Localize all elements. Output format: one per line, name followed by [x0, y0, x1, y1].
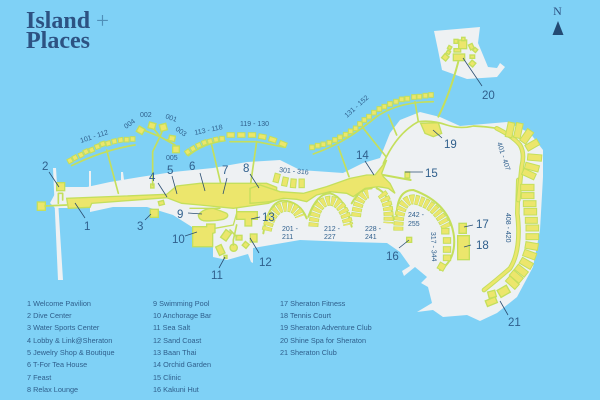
location numbers: 12 [259, 257, 272, 269]
room range labels: 005 [166, 155, 178, 162]
water sports center [150, 209, 158, 217]
legend column 2: 16 Kakuni Hut [153, 385, 199, 394]
room range labels: 119 - 130 [240, 121, 269, 128]
legend column 3: 19 Sheraton Adventure Club [280, 323, 372, 332]
legend column 1: 6 T-For Tea House [27, 360, 87, 369]
villas 228-241 right fill row [382, 193, 389, 223]
east road inner [484, 180, 519, 290]
villas 131-152 [313, 102, 433, 154]
location numbers: 14 [356, 150, 369, 162]
baan thai [237, 212, 257, 226]
villas 212-227 outline row [313, 201, 348, 227]
leader lines [49, 58, 508, 315]
clinic [383, 172, 411, 180]
room range labels: 131 - 152 [344, 94, 370, 119]
location numbers: 18 [476, 240, 489, 252]
location numbers: 11 [211, 270, 223, 282]
room range labels: 101 - 112 [79, 129, 109, 145]
legend column 2: 14 Orchid Garden [153, 360, 211, 369]
room range labels: 201 - [282, 226, 299, 233]
legend column 2: 15 Clinic [153, 373, 181, 382]
legend column 1: 4 Lobby & Link@Sheraton [27, 336, 112, 345]
pier and jetties [53, 168, 124, 280]
title: Island [26, 8, 91, 34]
legend column 2: 12 Sand Coast [153, 336, 201, 345]
room range labels: 228 - [365, 226, 382, 233]
villas 001-005 [136, 122, 179, 153]
legend column 2: 9 Swimming Pool [153, 299, 210, 308]
location numbers: 13 [262, 212, 275, 224]
legend column 1: 2 Dive Center [27, 311, 72, 320]
villas 201-211 fill row [267, 207, 300, 231]
villas 113-118 [188, 141, 225, 156]
villas 401-407 [505, 122, 542, 199]
room range labels: 242 - [408, 212, 425, 219]
location numbers: 1 [84, 221, 90, 233]
room range labels: 255 [408, 221, 420, 228]
room range labels: 408 - 420 [504, 213, 511, 243]
villas 317-344 and 301-316 [273, 173, 451, 271]
south east buildings and road [407, 180, 539, 306]
swimming pool [198, 208, 228, 221]
location numbers: 19 [444, 139, 457, 151]
legend column 1 [27, 299, 115, 394]
spa islet [434, 27, 505, 79]
location numbers: 9 [177, 209, 183, 221]
villas 228-241 left outline row [356, 193, 368, 217]
room range labels: 004 [123, 118, 137, 131]
central yellow band [250, 160, 395, 203]
location numbers: 21 [508, 317, 521, 329]
villas 242-255 fill row [398, 199, 447, 231]
tennis court [458, 236, 469, 260]
villas 408-420 [505, 185, 539, 289]
east road north inner [497, 128, 523, 200]
east road outer [484, 180, 519, 290]
legend column 1: 5 Jewelry Shop & Boutique [27, 348, 115, 357]
north-east roads and villas [310, 37, 542, 200]
legend column 1: 7 Feast [27, 373, 51, 382]
location numbers: 17 [476, 219, 489, 231]
location numbers: 16 [386, 251, 399, 263]
legend column 2: 11 Sea Salt [153, 323, 190, 332]
villas 228-241 left fill row [356, 193, 368, 217]
title [26, 8, 109, 54]
villas 242-255 outline row [398, 199, 447, 231]
room range labels: 401 - 407 [495, 141, 511, 172]
legend column 2 [153, 299, 212, 394]
stems [107, 126, 257, 193]
room range labels: 003 [174, 126, 188, 138]
legend column 3: 18 Tennis Court [280, 311, 331, 320]
east road north outer [497, 128, 523, 200]
location numbers: 7 [222, 165, 228, 177]
room range labels: 317 - 344 [429, 232, 437, 262]
dive center [57, 183, 65, 191]
sheraton fitness [459, 223, 466, 233]
room range labels: 212 - [324, 226, 341, 233]
sheraton adventure club [421, 123, 442, 137]
legend column 1: 3 Water Sports Center [27, 323, 100, 332]
legend column 3: 21 Sheraton Club [280, 348, 337, 357]
room range labels: 001 [164, 113, 178, 124]
room range labels: 241 [365, 234, 377, 241]
location numbers: 8 [243, 163, 249, 175]
room range labels: 113 - 118 [194, 124, 223, 137]
villas 101-112 [72, 145, 135, 166]
villas 201-211 outline row [267, 207, 300, 231]
central south villa loops [250, 160, 454, 271]
location numbers: 5 [167, 165, 173, 177]
legend column 3: 17 Sheraton Fitness [280, 299, 346, 308]
legend column 3: 20 Shine Spa for Sheraton [280, 336, 366, 345]
title: + [96, 8, 109, 33]
room range labels [79, 94, 511, 262]
location numbers [42, 90, 521, 329]
legend column 1: 1 Welcome Pavilion [27, 299, 91, 308]
location numbers: 3 [137, 221, 143, 233]
north arrow: N [553, 4, 562, 18]
villas 228-241 right outline row [382, 193, 389, 223]
anchorage bar [193, 224, 215, 247]
legend column 1: 8 Relax Lounge [27, 385, 78, 394]
legend column 2: 10 Anchorage Bar [153, 311, 212, 320]
location numbers: 2 [42, 161, 48, 173]
plaza and main road [67, 183, 277, 208]
room range labels: 227 [324, 234, 336, 241]
room range labels: 002 [140, 112, 152, 119]
north arrow [552, 4, 564, 35]
title: Places [26, 28, 90, 54]
location numbers: 6 [189, 161, 195, 173]
location numbers: 10 [172, 234, 185, 246]
main island landmass [50, 112, 543, 321]
location numbers: 20 [482, 90, 495, 102]
room range labels: 301 - 316 [279, 167, 309, 177]
villas 119-130 [230, 142, 285, 147]
sea salt and sand coast [216, 230, 257, 258]
room range labels: 211 [282, 234, 293, 241]
legend column 2: 13 Baan Thai [153, 348, 197, 357]
loop roads [263, 188, 454, 270]
location numbers: 15 [425, 168, 438, 180]
kakuni hut [407, 237, 412, 242]
location numbers: 4 [149, 172, 156, 184]
villas 212-227 fill row [313, 201, 348, 227]
spa buildings [442, 37, 478, 67]
welcome pavilion [37, 202, 45, 210]
sheraton club buildings [485, 285, 510, 306]
west section buildings and roads [37, 122, 287, 258]
lobby small [151, 184, 154, 188]
legend column 3 [280, 299, 372, 357]
